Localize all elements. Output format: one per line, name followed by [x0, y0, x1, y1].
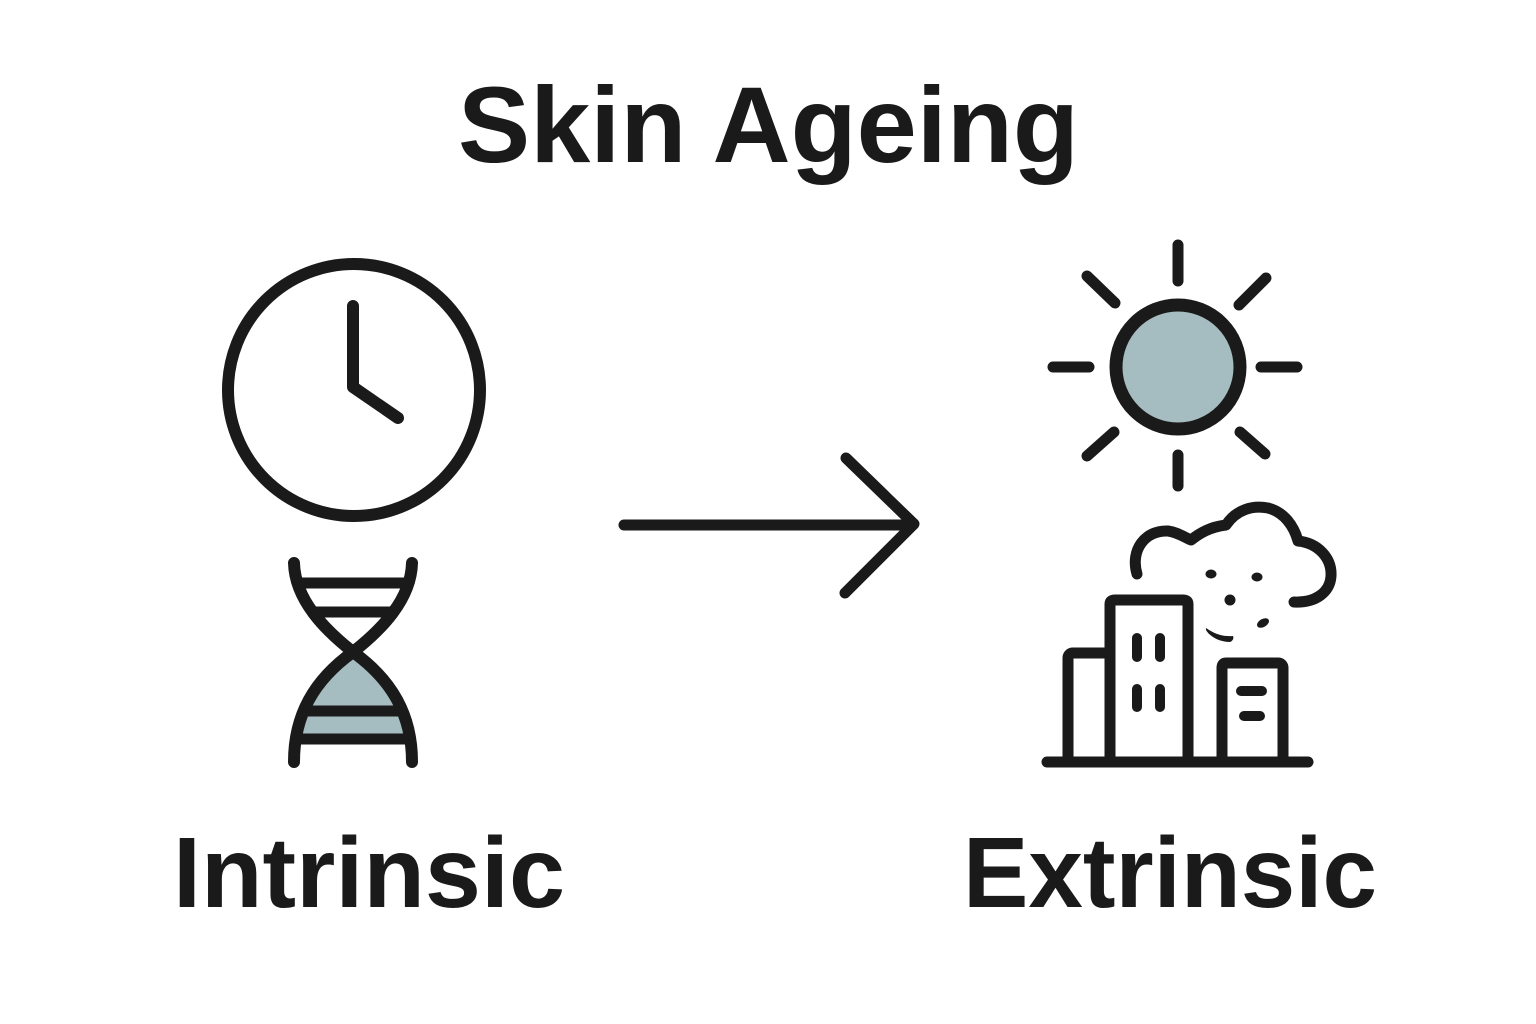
label: intrinsic: Intrinsic	[173, 817, 565, 929]
pollution particles	[1206, 570, 1271, 642]
windows	[1137, 638, 1160, 707]
label: extrinsic: Extrinsic	[963, 817, 1377, 929]
ground line	[1047, 756, 1308, 768]
cloud	[1135, 507, 1331, 602]
title: Skin Ageing	[458, 64, 1079, 185]
icon: city with pollution cloud	[1047, 507, 1331, 762]
buildings	[1068, 653, 1110, 762]
icon: sun	[1053, 245, 1297, 486]
arrow	[624, 458, 914, 593]
icon: DNA helix	[294, 563, 412, 762]
icon: clock	[228, 264, 480, 516]
